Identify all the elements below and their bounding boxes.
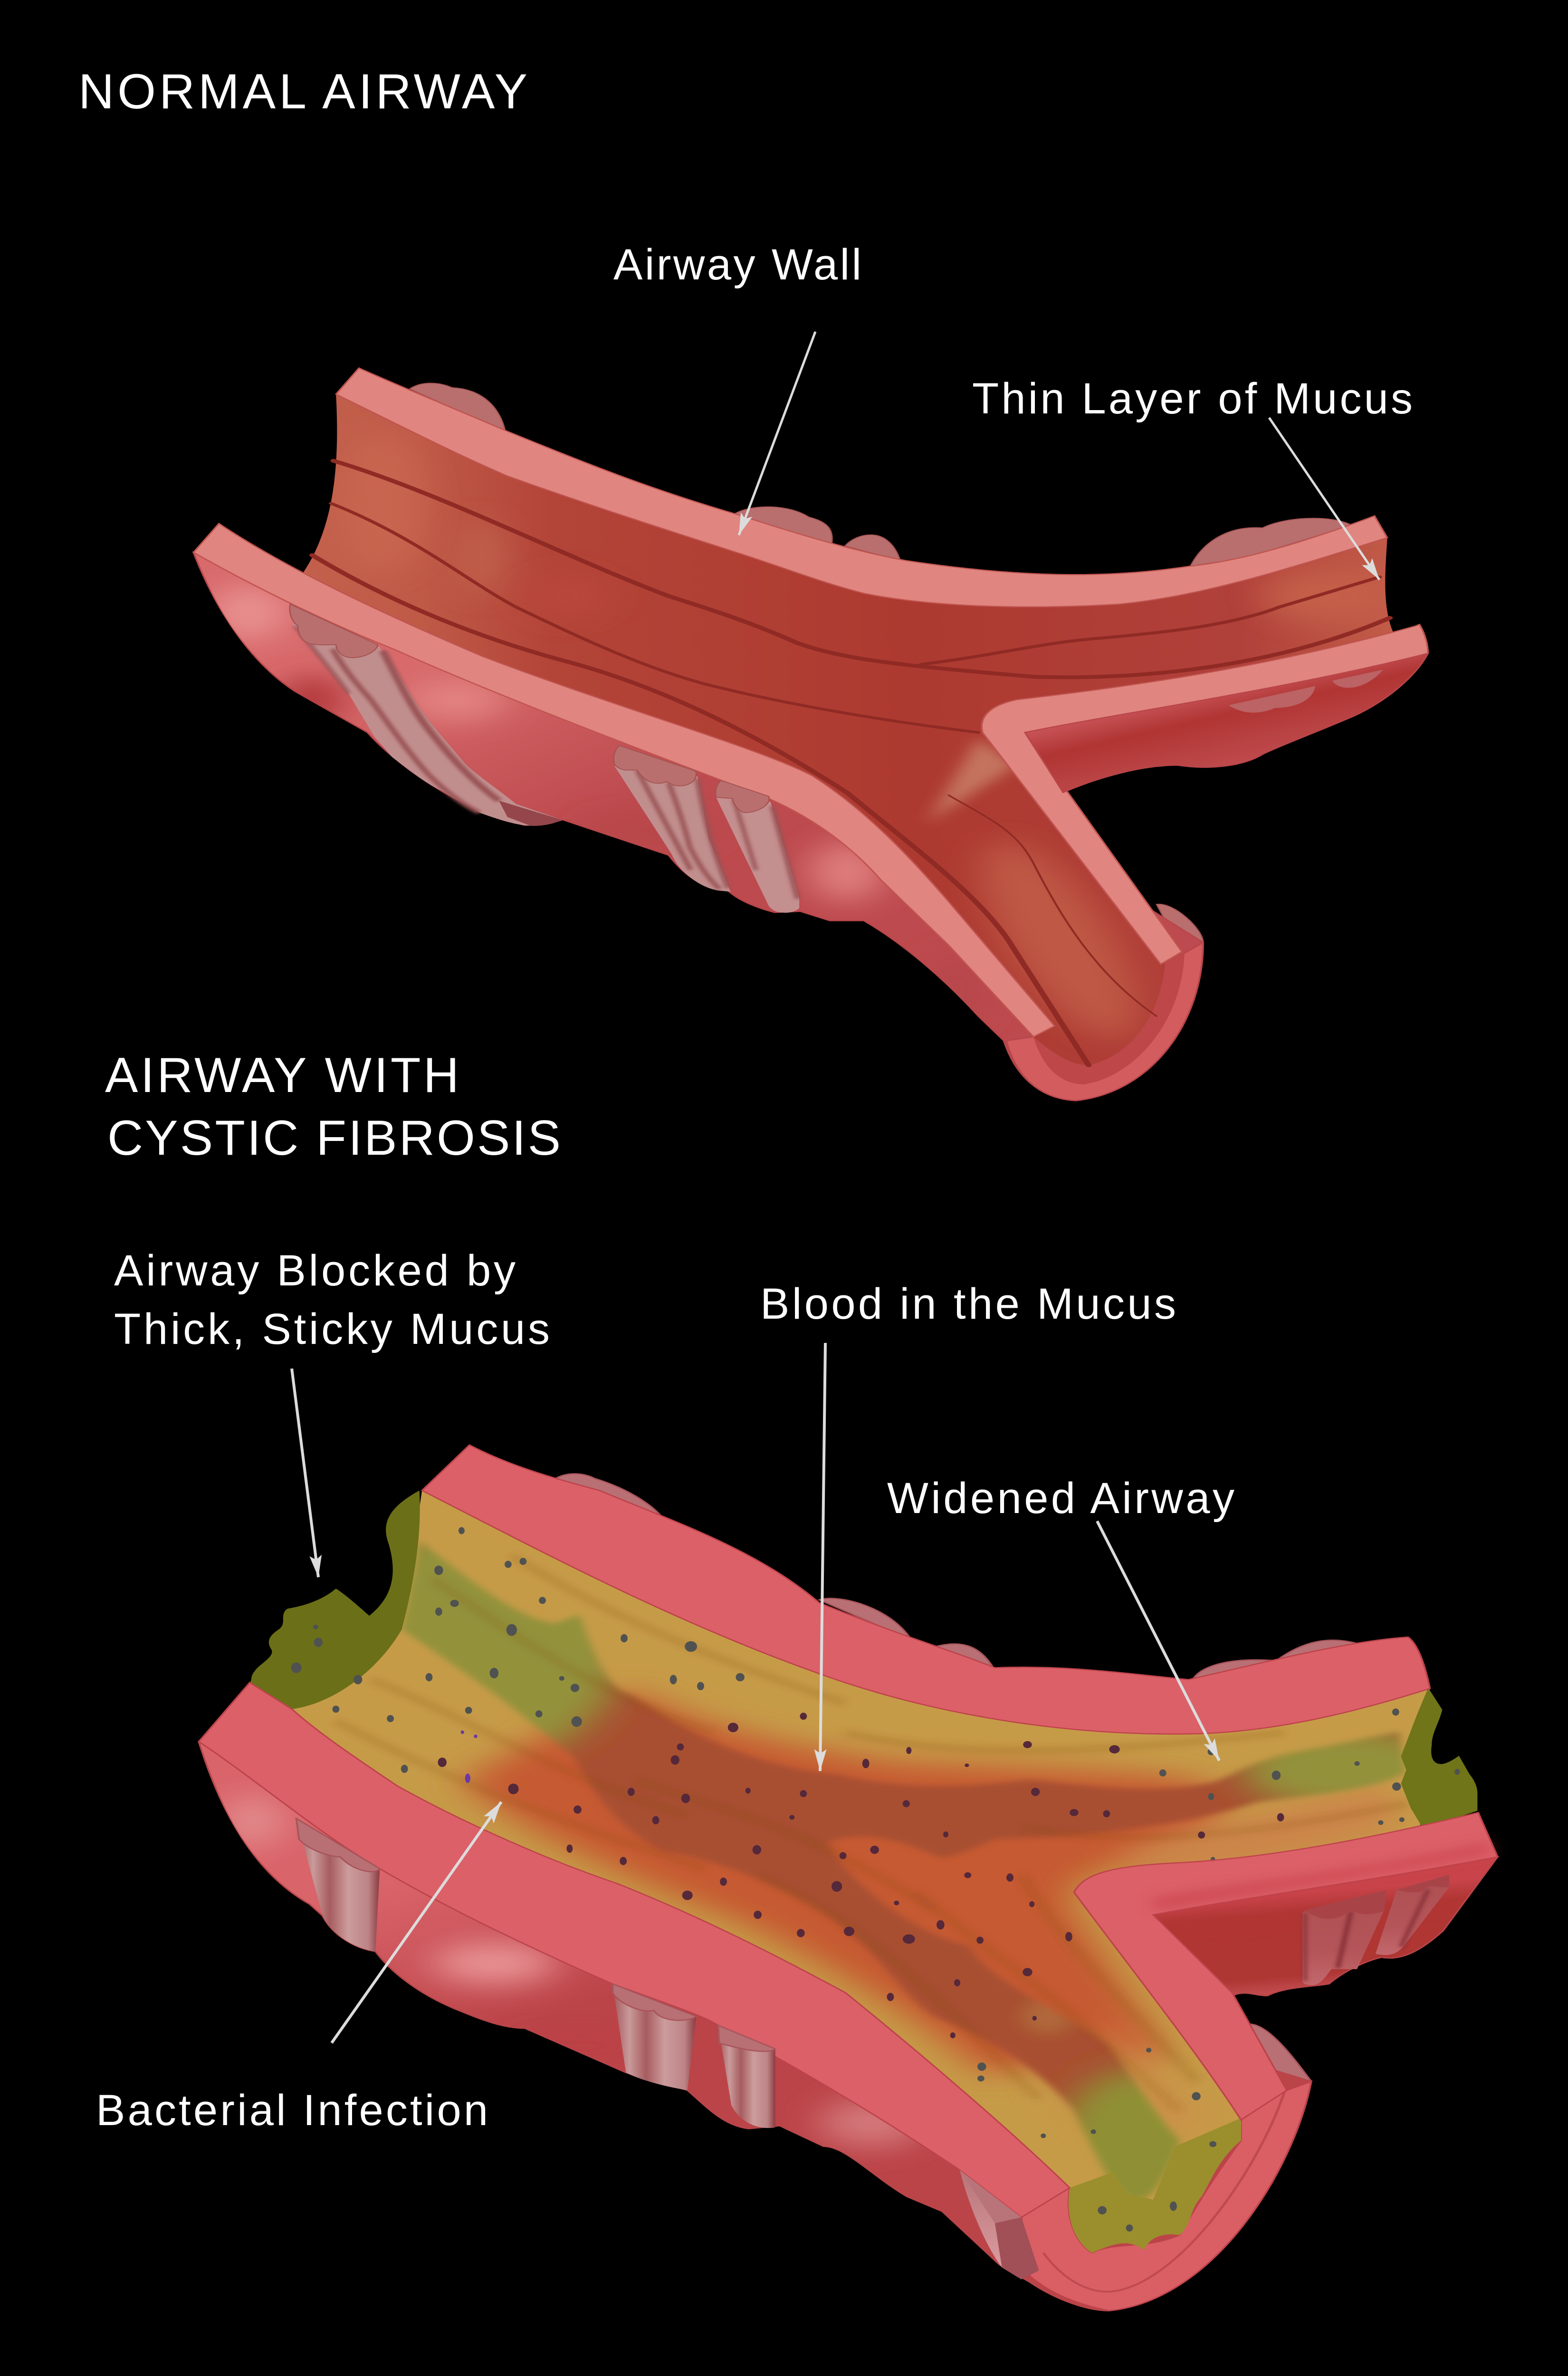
label: airway blocked by thick sticky mucus: Thick, Sticky Mucus xyxy=(114,1305,550,1353)
arrow: airway blocked xyxy=(292,1369,318,1577)
mucus streaks xyxy=(336,1555,1408,2111)
upper wall lip xyxy=(422,1445,1430,1734)
brown central band xyxy=(401,1542,1406,2199)
right underside xyxy=(1025,653,1428,793)
arrow: blood in the mucus xyxy=(820,1343,825,1771)
right mucus plug xyxy=(1401,1688,1477,1829)
end cartilage plate xyxy=(960,2170,1039,2280)
arrow: widened airway xyxy=(1097,1521,1219,1761)
heading: airway with cystic fibrosis xyxy=(105,1048,561,1166)
lower wall lip xyxy=(193,524,1055,1037)
inner airway wall xyxy=(302,394,1398,1065)
blood-tinged orange zone xyxy=(336,1542,1411,2252)
heading: airway with cystic fibrosis: AIRWAY WITH xyxy=(105,1048,459,1103)
mucus layer xyxy=(292,1491,1452,2288)
arrow: bacterial infection xyxy=(332,1802,501,2043)
arrow: airway wall xyxy=(739,332,815,535)
illustration: airway with cystic fibrosis xyxy=(199,1445,1498,2311)
bacteria dots xyxy=(291,1527,1460,2232)
branch lip xyxy=(1074,1812,1498,2120)
label: airway wall: Airway Wall xyxy=(613,240,861,289)
illustration: normal airway xyxy=(193,368,1428,1101)
branch lip xyxy=(982,624,1428,964)
heading: normal airway: NORMAL AIRWAY xyxy=(78,64,527,119)
tube end opening xyxy=(1022,2081,1311,2311)
arrow: thin layer of mucus xyxy=(1269,418,1379,580)
label: thin layer of mucus: Thin Layer of Mucus xyxy=(972,374,1413,423)
tube end opening rings xyxy=(1006,942,1203,1101)
upper wall lip xyxy=(336,368,1387,607)
outer tube underside xyxy=(199,1742,1311,2311)
tracheal ring 2 xyxy=(612,1984,696,2090)
tracheal ring 3 xyxy=(716,780,799,913)
left mucus plug xyxy=(250,1491,420,1709)
label: blood in the mucus: Blood in the Mucus xyxy=(760,1280,1176,1328)
label: widened airway: Widened Airway xyxy=(887,1474,1234,1523)
tracheal ring 1 xyxy=(290,604,562,826)
vein lines xyxy=(312,461,1390,1065)
cartilage bumps behind upper wall xyxy=(555,1474,1360,2090)
label: airway blocked by thick sticky mucus: Airway Blocked by xyxy=(114,1246,516,1295)
tracheal ring 3 xyxy=(718,2025,775,2128)
tracheal ring 2 xyxy=(614,746,730,892)
label: bacterial infection: Bacterial Infection xyxy=(96,2086,488,2135)
outer tube underside xyxy=(193,553,1203,1101)
lower wall lip xyxy=(199,1683,1070,2217)
label: airway blocked by thick sticky mucus xyxy=(114,1246,550,1353)
tracheal ring 1 xyxy=(296,1819,380,1952)
heading: airway with cystic fibrosis: CYSTIC FIBROSIS xyxy=(107,1111,561,1166)
cartilage bumps behind upper wall xyxy=(410,383,1352,952)
right underside xyxy=(1153,1857,1498,1996)
branch lip shading xyxy=(1153,1842,1492,1910)
